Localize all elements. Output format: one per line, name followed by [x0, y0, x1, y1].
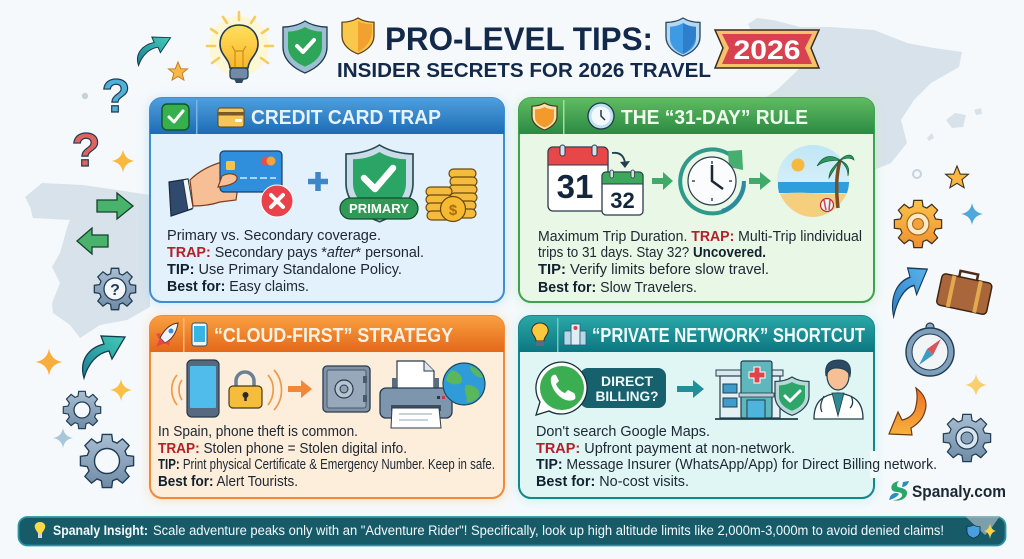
icon: gold star	[168, 62, 188, 80]
icon: red question mark: ?	[72, 123, 100, 176]
card heading: CREDIT CARD TRAP	[251, 107, 441, 129]
icon: gold sparkle	[110, 379, 132, 401]
icon: small bulb	[532, 323, 548, 346]
icon: briefcase	[936, 267, 994, 315]
illustration: phone and lock	[172, 360, 282, 417]
icon: primary shield	[340, 145, 418, 222]
panel: private network shortcut	[519, 316, 937, 498]
icon: gold gear	[894, 200, 942, 248]
icon: blue question mark: ?	[102, 69, 130, 122]
year ribbon badge	[715, 30, 819, 68]
icon: blue shield	[666, 18, 700, 56]
illustration: safe	[323, 366, 370, 412]
icon: primary shield: PRIMARY	[349, 202, 410, 216]
card text: Best for: Slow Travelers.	[538, 280, 697, 296]
card text: Maximum Trip Duration. TRAP: Multi-Trip lindividual	[538, 229, 862, 245]
panel: 31-day rule	[519, 98, 874, 302]
icon: green check badge	[162, 104, 189, 130]
icon: gold coins: $	[449, 202, 458, 219]
illustration: doctor	[814, 360, 863, 419]
arrow: green left	[77, 228, 108, 254]
arrow: orange curved	[889, 388, 926, 435]
icon: gear with question mark: ?	[110, 282, 120, 299]
card text: Primary vs. Secondary coverage.	[167, 228, 381, 244]
card text	[536, 424, 937, 490]
icon: gold coins	[426, 169, 477, 222]
illustration: calendars: 32	[610, 188, 635, 213]
insight banner	[18, 516, 1006, 546]
icon: green check shield	[283, 21, 327, 73]
illustration: whatsapp direct billing pill	[536, 362, 666, 415]
card heading: “CLOUD-FIRST” STRATEGY	[214, 325, 454, 347]
card body	[150, 98, 504, 302]
panel: cloud-first strategy	[150, 316, 504, 498]
card text: Best for: Alert Tourists.	[158, 474, 298, 490]
icon: gear small	[63, 391, 101, 429]
illustration: hand holding card	[169, 151, 293, 217]
icon: lightbulb	[207, 12, 273, 83]
soft card glows	[147, 97, 877, 502]
banner text: Scale adventure peaks only with an "Adventure Rider"! Specifically, look up high altitude limits like 2,000m-3,000m to avoid denied claims!	[153, 523, 944, 538]
arrow: teal	[677, 380, 704, 398]
card header	[519, 98, 874, 134]
illustration: clock with circular arrow	[680, 149, 744, 213]
card text	[167, 228, 424, 295]
icon: small hospital	[564, 324, 586, 345]
card text: Best for: Easy claims.	[167, 279, 309, 295]
icon: orange shield	[532, 103, 557, 130]
subtitle: INSIDER SECRETS FOR 2026 TRAVEL	[337, 60, 711, 82]
icon: network shield	[775, 377, 809, 415]
icon: gold sparkle	[112, 150, 134, 172]
card heading: THE “31-DAY” RULE	[621, 107, 808, 129]
icon: gear with question mark	[94, 268, 136, 310]
card body	[519, 316, 874, 498]
icon: gear large	[80, 434, 134, 488]
year ribbon badge: 2026	[734, 35, 800, 65]
arrow: green	[652, 172, 673, 190]
arrow: orange	[288, 380, 312, 398]
arrow: blue curved	[893, 268, 927, 317]
card text: TIP: Verify limits before slow travel.	[538, 262, 769, 278]
illustration: whatsapp direct billing pill: DIRECT	[601, 373, 653, 389]
arrow: teal top left	[137, 37, 171, 66]
arrow: teal curved	[83, 336, 125, 378]
icon: blue sparkle	[961, 203, 983, 225]
illustration: printer	[380, 361, 452, 428]
ring	[913, 170, 921, 178]
card text: Don't search Google Maps.	[536, 424, 710, 440]
arrow: green right	[97, 193, 133, 219]
icon: gold star right	[946, 166, 968, 188]
icon: rocket	[156, 323, 178, 347]
icon: globe	[443, 363, 485, 405]
card header	[150, 98, 504, 134]
card text: In Spain, phone theft is common.	[158, 424, 358, 440]
banner text: Spanaly Insight:	[53, 523, 148, 538]
card text: TIP: Use Primary Standalone Policy.	[167, 262, 402, 278]
logo: Spanaly.com: Spanaly.com	[912, 483, 1006, 501]
card heading: “PRIVATE NETWORK” SHORTCUT	[592, 325, 865, 347]
icon: compass	[906, 323, 954, 376]
illustration: calendars: 31	[557, 168, 593, 205]
card header	[519, 316, 874, 352]
card text: Best for: No-cost visits.	[536, 474, 689, 490]
icon: pale sparkle	[53, 428, 73, 448]
card text: TRAP: Stolen phone = Stolen digital info.	[158, 441, 407, 457]
card text: TIP: Print physical Certificate & Emergency Number. Keep in safe.	[158, 457, 495, 473]
icon: small credit card	[218, 108, 244, 127]
icon: clock small	[588, 103, 614, 129]
card text: TIP: Message Insurer (WhatsApp/App) for Direct Billing network.	[536, 457, 937, 473]
icon: small phone	[192, 323, 207, 346]
illustration: hospital	[715, 361, 798, 419]
panel: credit card trap	[150, 98, 504, 302]
card text: TRAP: Upfront payment at non-network.	[536, 441, 795, 457]
dot	[82, 93, 88, 99]
map: Spain silhouette top right	[748, 18, 982, 170]
illustration: calendars	[548, 145, 643, 215]
logo: Spanaly.com	[889, 481, 1006, 501]
icon: plus	[308, 172, 328, 191]
icon: gold sparkle pale	[965, 374, 987, 396]
icon: gold shield	[342, 18, 374, 54]
card body	[150, 316, 504, 498]
icon: gear right	[943, 414, 991, 462]
card text	[158, 424, 495, 490]
illustration: whatsapp direct billing pill: BILLING?	[596, 388, 658, 404]
card text: TRAP: Secondary pays *after* personal.	[167, 245, 424, 261]
icon: shield	[967, 525, 980, 538]
card text	[538, 229, 862, 296]
arrow: green	[749, 172, 771, 190]
card text: trips to 31 days. Stay 32? Uncovered.	[538, 245, 766, 261]
card body	[519, 98, 874, 302]
icon: gold sparkle	[36, 348, 62, 376]
map: Spain silhouette left	[25, 183, 150, 338]
icon: bulb	[35, 522, 45, 538]
icon: sparkles	[984, 523, 996, 539]
title: PRO-LEVEL TIPS:	[385, 21, 653, 57]
illustration: beach	[777, 145, 854, 217]
card header	[150, 316, 504, 352]
